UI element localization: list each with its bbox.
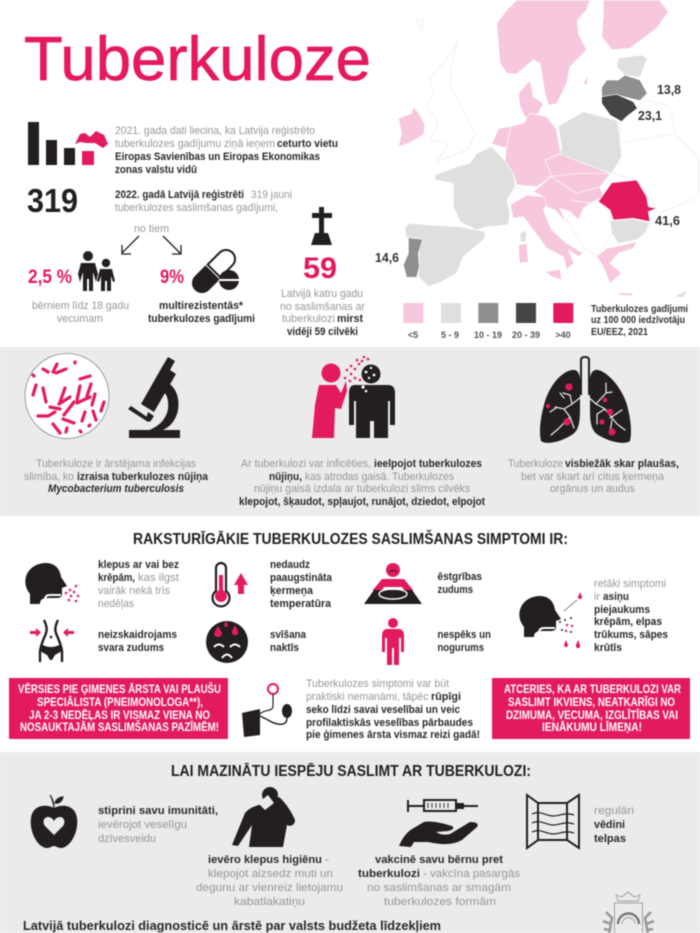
icon: person at table xyxy=(364,563,422,604)
map value labels: 41,6 xyxy=(655,213,680,228)
text: deaths: Latvijā katru gadu xyxy=(281,288,363,300)
icon: waist xyxy=(30,620,74,662)
icon: vaccination hand xyxy=(399,800,478,847)
text: children caption xyxy=(32,300,129,325)
text: cough hygiene: ievēro klepus higiēnu xyxy=(208,854,322,866)
text: vaccination: tuberkulozi xyxy=(358,868,420,880)
icon: Latvian coat of arms xyxy=(603,892,654,933)
text: weight loss: neizskaidrojams xyxy=(98,629,177,641)
text: children caption: bērniem līdz 18 gadu xyxy=(32,300,129,312)
text: rarer symptoms: asiņu xyxy=(603,591,629,603)
text: fatigue: nogurums xyxy=(438,642,484,654)
icon: children xyxy=(78,251,115,291)
text: cough symptom: krēpām, xyxy=(98,572,135,584)
text: 2022 new cases xyxy=(115,188,292,214)
text: cough hygiene: kabatlakatiņu xyxy=(234,896,305,908)
text: cough symptom: kas ilgst xyxy=(138,572,179,584)
text: cough hygiene: - xyxy=(325,854,329,866)
text: multidrug resistant: tuberkulozes gadījumi xyxy=(148,313,255,325)
text: immunity xyxy=(98,805,218,845)
text: rarer symptoms: ir xyxy=(594,591,600,603)
icon: open window xyxy=(527,795,579,848)
callout: see your doctor: VĒRSIES PIE ĢIMENES ĀRSTA VAI PLAUŠU xyxy=(18,681,221,696)
stat: 2.5 percent: 2,5 % xyxy=(28,267,72,288)
text: children caption: vecumam xyxy=(57,313,103,325)
text: cough hygiene: degunu ar vienreiz lietojamu xyxy=(196,882,343,894)
stat: 319: 319 xyxy=(27,182,78,219)
text: multidrug resistant: multirezistentās* xyxy=(159,300,244,312)
map legend: >40 xyxy=(555,330,571,340)
panel: about tuberculosis xyxy=(0,347,700,516)
text: fourth place: zonas valstu vidū xyxy=(115,164,197,176)
map value labels: 23,1 xyxy=(638,108,662,123)
icon: coughing head xyxy=(25,563,79,604)
text: night sweats: naktīs xyxy=(270,642,299,654)
callout: see your doctor: JA 2-3 NEDĒĻAS IR VISMAZ VIENA NO xyxy=(29,708,210,722)
text: immunity: stiprini savu imunitāti, xyxy=(98,805,218,817)
icon: sweating face xyxy=(206,621,248,663)
callout: see your doctor: SPECIĀLISTA (PNEIMONOLOGA**), xyxy=(37,695,203,709)
label: no tiem with arrows xyxy=(122,223,181,254)
map legend: 20 - 39 xyxy=(512,330,540,340)
stat: 59: 59 xyxy=(303,252,337,285)
icon: capsule and pill xyxy=(188,246,239,297)
text: multidrug resistant xyxy=(148,300,255,325)
text: deaths: mirst xyxy=(337,313,363,325)
map legend: <5 xyxy=(408,330,418,340)
label: no tiem with arrows: no tiem xyxy=(134,223,169,235)
France and Belgium xyxy=(435,147,515,230)
text: cough symptom: klepus ar vai bez xyxy=(98,559,179,571)
text: airborne spread: klepojot, šķaudot, spļaujot, runājot, dziedot, elpojot xyxy=(239,496,485,508)
text: ventilate: regulāri xyxy=(594,805,634,817)
text: night sweats xyxy=(270,629,307,654)
text: affects lungs: visbiežāk skar plaušas, xyxy=(565,458,679,470)
text: loss of appetite xyxy=(438,571,482,596)
Iberia xyxy=(405,223,485,287)
text: 2022 new cases: 2022. gadā Latvijā reģistrēti xyxy=(115,188,244,201)
heading: prevention: LAI MAZINĀTU IESPĒJU SASLIMT AR TUBERKULOZI: xyxy=(171,761,531,780)
text: state budget note: Latvijā tuberkulozi diagnosticē un ārstē par valsts budžeta līdzekļiem xyxy=(23,918,441,933)
icon: tired figure xyxy=(382,618,404,665)
text: monitor your health: profilaktiskās veselības pārbaudes xyxy=(306,717,473,729)
text: deaths: no saslimšanas ar xyxy=(280,301,365,313)
text: fourth place xyxy=(115,124,338,176)
text: rarer symptoms: trūkums, sāpes xyxy=(594,629,668,641)
map legend: 10 - 19 xyxy=(474,330,502,340)
icon: grave cross xyxy=(311,207,332,245)
text: night sweats: svīšana xyxy=(270,629,307,641)
text: fatigue: nespēks un xyxy=(438,629,491,641)
text: affects lungs: bet var skart arī citus ķermeņa xyxy=(521,471,665,483)
text: fourth place: 2021. gada dati liecina, ka Latvija reģistrēto xyxy=(115,124,315,137)
text: curable infection: izraisa tuberkulozes nūjiņa xyxy=(77,471,209,483)
callout: anyone can get sick: IENĀKUMU LĪMEŅA! xyxy=(542,720,642,734)
Scandinavia xyxy=(497,0,590,105)
text: deaths: tuberkulozi xyxy=(282,313,335,325)
text: fourth place: ceturto vietu xyxy=(277,138,338,150)
text: cough hygiene: klepojot aizsedz muti un xyxy=(208,868,333,880)
text: fourth place: tuberkulozes gadījumu ziņā ieņem xyxy=(115,138,275,150)
map legend: Tuberkulozes gadījumi xyxy=(591,304,688,315)
text: affects lungs: Tuberkuloze xyxy=(508,458,563,470)
Ireland xyxy=(398,107,425,147)
text: weight loss xyxy=(98,629,177,654)
icon: people and droplets xyxy=(312,356,395,438)
text: affects lungs: orgānus un audus xyxy=(550,483,635,495)
Central Europe xyxy=(533,154,611,223)
text: fatigue xyxy=(438,629,491,654)
text: curable infection: Tuberkuloze ir ārstējama infekcijas xyxy=(36,458,196,470)
text: curable infection xyxy=(24,458,209,495)
map legend: EU/EEZ, 2021 xyxy=(591,327,648,338)
title: Tuberkuloze xyxy=(24,25,371,94)
Italy xyxy=(510,195,583,269)
Romania xyxy=(598,180,657,222)
text: curable infection: slimība, ko xyxy=(24,471,74,483)
text: monitor your health: seko līdzi savai veselībai un veic xyxy=(306,704,460,716)
text: vaccination: vakcinē savu bērnu pret xyxy=(375,854,503,866)
text: cough hygiene xyxy=(196,854,343,908)
callout: see your doctor xyxy=(9,678,228,739)
text: loss of appetite: zudums xyxy=(438,584,473,596)
text: rarer symptoms: retāki simptomi xyxy=(594,578,666,590)
text: monitor your health: pie ģimenes ārsta vismaz reizi gadā! xyxy=(306,728,480,741)
text: rarer symptoms: krūtīs xyxy=(594,642,622,654)
map of Europe xyxy=(398,0,698,298)
icon: thermometer xyxy=(213,563,248,606)
icon: apple xyxy=(31,795,77,848)
map legend: uz 100 000 iedzīvotāju xyxy=(591,315,685,326)
Baltics xyxy=(617,55,647,77)
callout: anyone can get sick xyxy=(492,678,690,739)
stat: 9 percent: 9% xyxy=(160,267,184,288)
text: monitor your health: Tuberkulozes simptomi var būt xyxy=(306,678,449,690)
text: monitor your health xyxy=(306,678,480,741)
map legend xyxy=(403,303,688,340)
text: immunity: ievērojot veselīgu xyxy=(98,819,187,831)
text: cough symptom xyxy=(98,559,179,610)
text: immunity: dzīvesveidu xyxy=(98,833,156,845)
text: temperature: temperatūra xyxy=(270,598,332,610)
text: 2022 new cases: 319 jauni xyxy=(251,189,292,201)
text: rarer symptoms: piejaukums xyxy=(594,604,650,616)
icon: blood pressure monitor xyxy=(242,684,292,737)
map value labels: 14,6 xyxy=(375,250,399,265)
heading: symptoms: RAKSTURĪGĀKIE TUBERKULOZES SASLIMŠANAS SIMPTOMI IR: xyxy=(133,529,568,548)
Greece xyxy=(597,242,637,283)
text: 2022 new cases: tuberkulozes saslimšanas gadījumi, xyxy=(115,202,278,214)
icon: bacteria in petri dish xyxy=(25,354,109,438)
text: vaccination xyxy=(358,854,521,908)
text: cough symptom: vairāk nekā trīs xyxy=(98,585,170,597)
text: monitor your health: rūpīgi xyxy=(431,691,461,703)
text: airborne spread: nūjiņu, xyxy=(269,471,302,483)
text: monitor your health: praktiski nemanāmi, tāpēc xyxy=(306,691,429,703)
map value labels: 13,8 xyxy=(657,82,681,97)
text: ventilate xyxy=(594,805,634,845)
text: airborne spread: ieelpojot tuberkulozes xyxy=(374,458,482,470)
Bulgaria xyxy=(610,219,650,243)
text: ventilate: telpas xyxy=(594,833,626,845)
callout: see your doctor: NOSAUKTAJĀM SASLIMŠANAS PAZĪMĒM! xyxy=(20,719,219,734)
icon: lungs xyxy=(540,357,631,443)
text: airborne spread: Ar tuberkulozi var inficēties, xyxy=(241,458,371,470)
text: affects lungs xyxy=(508,458,679,495)
text: loss of appetite: ēstgrības xyxy=(438,571,482,583)
text: vaccination: tuberkulozes formām xyxy=(384,896,496,908)
text: airborne spread xyxy=(239,458,485,508)
text: rarer symptoms: krēpām, elpas xyxy=(594,616,662,628)
text: temperature: paaugstināta xyxy=(270,572,333,584)
icon: ranking bars with Latvia xyxy=(28,122,108,165)
text: cough symptom: nedēļas xyxy=(98,598,134,610)
text: temperature: ķermeņa xyxy=(270,585,314,597)
icon: microscope xyxy=(128,357,180,438)
icon: person covering cough xyxy=(232,787,295,847)
text: curable infection: Mycobacterium tuberculosis xyxy=(48,483,184,495)
panel: prevention xyxy=(0,752,700,933)
text: airborne spread: kas atrodas gaisā. Tuberkulozes xyxy=(305,471,454,483)
text: temperature: nedaudz xyxy=(270,559,310,571)
icon: coughing blood xyxy=(519,592,582,648)
text: deaths: vidēji 59 cilvēki xyxy=(287,326,358,338)
text: deaths xyxy=(280,288,365,338)
text: vaccination: - vakcīna pasargās xyxy=(423,868,521,880)
text: fourth place: Eiropas Savienības un Eiropas Ekonomikas xyxy=(115,151,320,163)
text: weight loss: svara zudums xyxy=(98,642,164,654)
text: temperature xyxy=(270,559,333,610)
map legend: 5 - 9 xyxy=(441,330,459,340)
text: rarer symptoms xyxy=(594,578,668,654)
text: airborne spread: nūjiņu gaisā izdala ar tuberkulozi slims cilvēks xyxy=(254,483,470,495)
map value labels xyxy=(375,82,681,265)
text: vaccination: no saslimšanas ar smagām xyxy=(367,882,511,894)
Poland xyxy=(558,112,622,173)
text: ventilate: vēdini xyxy=(594,819,625,831)
